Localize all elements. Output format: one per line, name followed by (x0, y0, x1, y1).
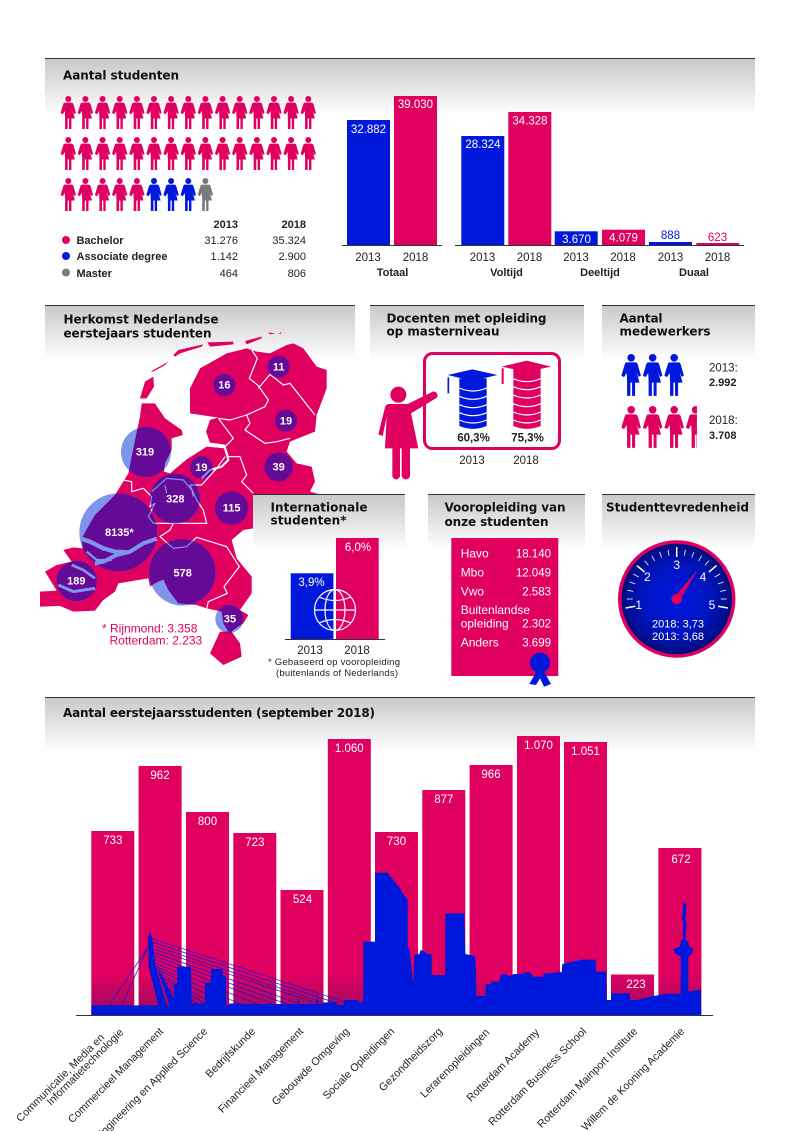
map of the Netherlands: 319 (136, 447, 154, 459)
bar chart: totaal: Totaal (377, 267, 408, 279)
table: studenten per opleiding: 806 (288, 268, 306, 280)
bar chart: voltijd deeltijd duaal: 34.328 (512, 116, 548, 128)
pictogram: students (61, 96, 316, 211)
footnote (268, 657, 400, 679)
frame with stacks: 60,3% (457, 432, 490, 444)
text: staff numbers (709, 362, 738, 442)
heading: aantal studenten: Aantal studenten (63, 68, 179, 82)
footnote: * Gebaseerd op vooropleiding (268, 657, 400, 668)
bar chart: voltijd deeltijd duaal: 888 (661, 230, 680, 242)
panel: herkomst: Rotterdam: 2.233 (110, 634, 203, 648)
map of the Netherlands: 39 (273, 462, 285, 474)
bar chart: voltijd deeltijd duaal: Voltijd (490, 267, 523, 279)
map of the Netherlands: 19 (280, 415, 292, 427)
text: staff numbers: 2013: (709, 362, 738, 374)
category labels: Rotterdam Business School (486, 1026, 589, 1128)
gauge: 2 (644, 570, 651, 584)
bar values (103, 740, 691, 991)
map of the Netherlands: 328 (166, 493, 184, 505)
pictogram: staff 2018 (621, 406, 705, 448)
icon: globe (314, 589, 356, 639)
heading: medewerkers: Aantal (620, 312, 662, 326)
table: vooropleiding: Mbo (461, 566, 484, 580)
category labels: Commercieel Management (66, 1026, 166, 1126)
bar values: 723 (245, 837, 264, 849)
bar values: 962 (150, 770, 170, 782)
bar chart: voltijd deeltijd duaal: 2018 (610, 252, 636, 264)
year labels: docenten: 2013 (459, 455, 485, 467)
category labels: Financieel Management (216, 1026, 306, 1116)
year labels: docenten: 2018 (513, 455, 539, 467)
bar chart: voltijd deeltijd duaal (455, 112, 744, 279)
panel: internationale studenten: studenten* (270, 514, 347, 528)
panel: docenten (370, 305, 584, 479)
text: staff numbers: 2018: (709, 415, 738, 427)
panel: docenten: op masterniveau (386, 324, 500, 338)
note: rijnmond: * Rijnmond: 3.358 (102, 622, 198, 636)
table: vooropleiding: 2.302 (522, 618, 551, 630)
map of the Netherlands: 115 (223, 503, 241, 515)
frame with stacks (378, 354, 560, 479)
bar chart: totaal: 32.882 (351, 124, 386, 136)
bar chart: internationale (285, 538, 385, 657)
panel: studenttevredenheid (602, 494, 755, 656)
heading: internationale: Internationale (270, 500, 368, 514)
table: vooropleiding: Havo (461, 546, 489, 560)
category labels: Lerarenopleidingen (418, 1027, 492, 1100)
table: vooropleiding: Vwo (461, 584, 484, 598)
icon: pink stack of books with cap (502, 361, 551, 429)
bar values: 223 (626, 979, 646, 991)
bar chart: voltijd deeltijd duaal: 2013 (470, 252, 495, 264)
category labels: Informatietechnologie (45, 1027, 126, 1108)
text: staff numbers: 3.708 (709, 430, 737, 442)
bar values: 730 (387, 836, 406, 848)
bar chart: internationale: 2018 (344, 645, 370, 657)
table: vooropleiding: 12.049 (516, 568, 551, 580)
gauge: 3 (673, 558, 680, 572)
category labels: Sociale Opleidingen (321, 1026, 397, 1102)
heading: vooropleiding: Vooropleiding van (444, 500, 566, 514)
table: studenten per opleiding: 2.900 (278, 251, 306, 263)
gauge (620, 542, 734, 656)
map of the Netherlands: 8135* (105, 527, 134, 539)
panel: medewerkers (602, 305, 755, 448)
bar values: 966 (481, 769, 501, 781)
category labels: Gebouwde Omgeving (270, 1026, 352, 1108)
bar values: 1.051 (571, 746, 600, 758)
bar chart: voltijd deeltijd duaal: 2018 (705, 252, 730, 264)
bar chart: internationale: 6,0% (345, 542, 371, 554)
gauge: 5 (709, 598, 716, 612)
bar chart: totaal: 2018 (403, 252, 428, 264)
category labels: Communicatie, Media en (14, 1032, 107, 1125)
panel: aantal studenten (45, 58, 755, 280)
heading: herkomst: Herkomst Nederlandse (64, 312, 218, 326)
illustration: Rotterdam skyline (91, 873, 701, 1016)
table: studenten per opleiding (62, 219, 306, 280)
footnote: (buitenlands of Nederlands) (276, 668, 398, 679)
category labels: Rotterdam Academy (464, 1026, 543, 1104)
panel: herkomst: eerstejaars studenten (64, 326, 212, 340)
panel: internationale studenten (253, 494, 405, 694)
bar chart: totaal (342, 96, 442, 279)
bar values: 1.070 (524, 740, 553, 752)
map of the Netherlands: 189 (67, 576, 85, 588)
bar chart: voltijd deeltijd duaal: 2018 (517, 252, 542, 264)
map of the Netherlands (40, 332, 340, 665)
icon: teacher (378, 387, 437, 479)
table: vooropleiding: 18.140 (516, 548, 551, 560)
panel: vooropleiding (428, 494, 585, 687)
bar values: 672 (671, 854, 691, 866)
map of the Netherlands: 16 (218, 380, 230, 392)
table: studenten per opleiding: 2013 (214, 219, 238, 231)
table: studenten per opleiding: 464 (220, 268, 238, 280)
bar chart: voltijd deeltijd duaal: 623 (708, 232, 727, 244)
table: studenten per opleiding: Master (76, 268, 113, 280)
table: studenten per opleiding: Bachelor (76, 235, 124, 247)
bar values: 877 (434, 794, 453, 806)
map of the Netherlands: 578 (174, 568, 192, 580)
gauge: 1 (635, 598, 642, 612)
category labels (14, 1026, 687, 1131)
icon: blue stack of books with cap (448, 369, 497, 429)
category labels: Rotterdam Mainport Institute (535, 1026, 640, 1130)
bar values: 1.060 (335, 743, 364, 755)
table: vooropleiding: 2.583 (522, 586, 551, 598)
text: staff numbers: 2.992 (709, 377, 737, 389)
bar chart: internationale: 3,9% (298, 577, 325, 589)
gauge: 4 (700, 570, 707, 584)
map of the Netherlands: 19 (195, 462, 207, 474)
pictogram: staff 2013 (621, 354, 684, 396)
table: studenten per opleiding: 2018 (282, 219, 306, 231)
panel: herkomst (40, 305, 355, 665)
bar chart: voltijd deeltijd duaal: 2013 (563, 252, 589, 264)
panel: vooropleiding: onze studenten (444, 515, 548, 529)
bar chart: voltijd deeltijd duaal: Duaal (679, 267, 709, 279)
bar chart: voltijd deeltijd duaal: 2013 (658, 252, 683, 264)
category labels: Gezondheidszorg (377, 1026, 445, 1094)
table: studenten per opleiding: 31.276 (204, 235, 238, 247)
gauge: 2018: 3,73 (652, 618, 704, 630)
table: studenten per opleiding: 1.142 (210, 251, 238, 263)
bar chart: voltijd deeltijd duaal: 4.079 (609, 232, 638, 244)
gauge: 2013: 3,68 (652, 631, 704, 643)
table: vooropleiding: Buitenlandse (461, 603, 530, 617)
table: vooropleiding: Anders (461, 636, 499, 650)
bar chart: voltijd deeltijd duaal: Deeltijd (580, 267, 620, 279)
bar chart: totaal: 39.030 (398, 99, 433, 111)
bar chart: opleidingen (91, 736, 701, 1016)
category labels: Bedrijfskunde (203, 1026, 258, 1080)
map of the Netherlands: 35 (224, 614, 236, 626)
table: vooropleiding: opleiding (461, 616, 509, 630)
heading: eerstejaarsstudenten: Aantal eerstejaarsstudenten (september 2018) (63, 706, 375, 720)
category labels: Willem de Kooning Academie (579, 1026, 687, 1131)
panel: medewerkers: medewerkers (620, 324, 710, 338)
table: studenten per opleiding: Associate degree (76, 251, 168, 263)
bar values: 524 (293, 894, 313, 906)
table: vooropleiding (451, 538, 558, 676)
heading: docenten: Docenten met opleiding (386, 312, 546, 326)
frame with stacks: 75,3% (511, 432, 544, 444)
axis (76, 1014, 713, 1016)
bar chart: voltijd deeltijd duaal: 3.670 (562, 234, 591, 246)
bar values: 800 (198, 816, 217, 828)
bar chart: internationale: 2013 (297, 645, 323, 657)
bar chart: totaal: 2013 (355, 252, 381, 264)
bar values: 733 (103, 835, 122, 847)
map of the Netherlands: 11 (273, 361, 284, 373)
panel: eerstejaarsstudenten (14, 697, 755, 1131)
year labels: docenten (459, 455, 539, 467)
table: vooropleiding: 3.699 (522, 638, 551, 650)
bar chart: voltijd deeltijd duaal: 28.324 (465, 139, 501, 151)
heading: studenttevredenheid: Studenttevredenheid (606, 500, 749, 514)
icon: rosette (529, 653, 551, 687)
table: studenten per opleiding: 35.324 (272, 235, 306, 247)
